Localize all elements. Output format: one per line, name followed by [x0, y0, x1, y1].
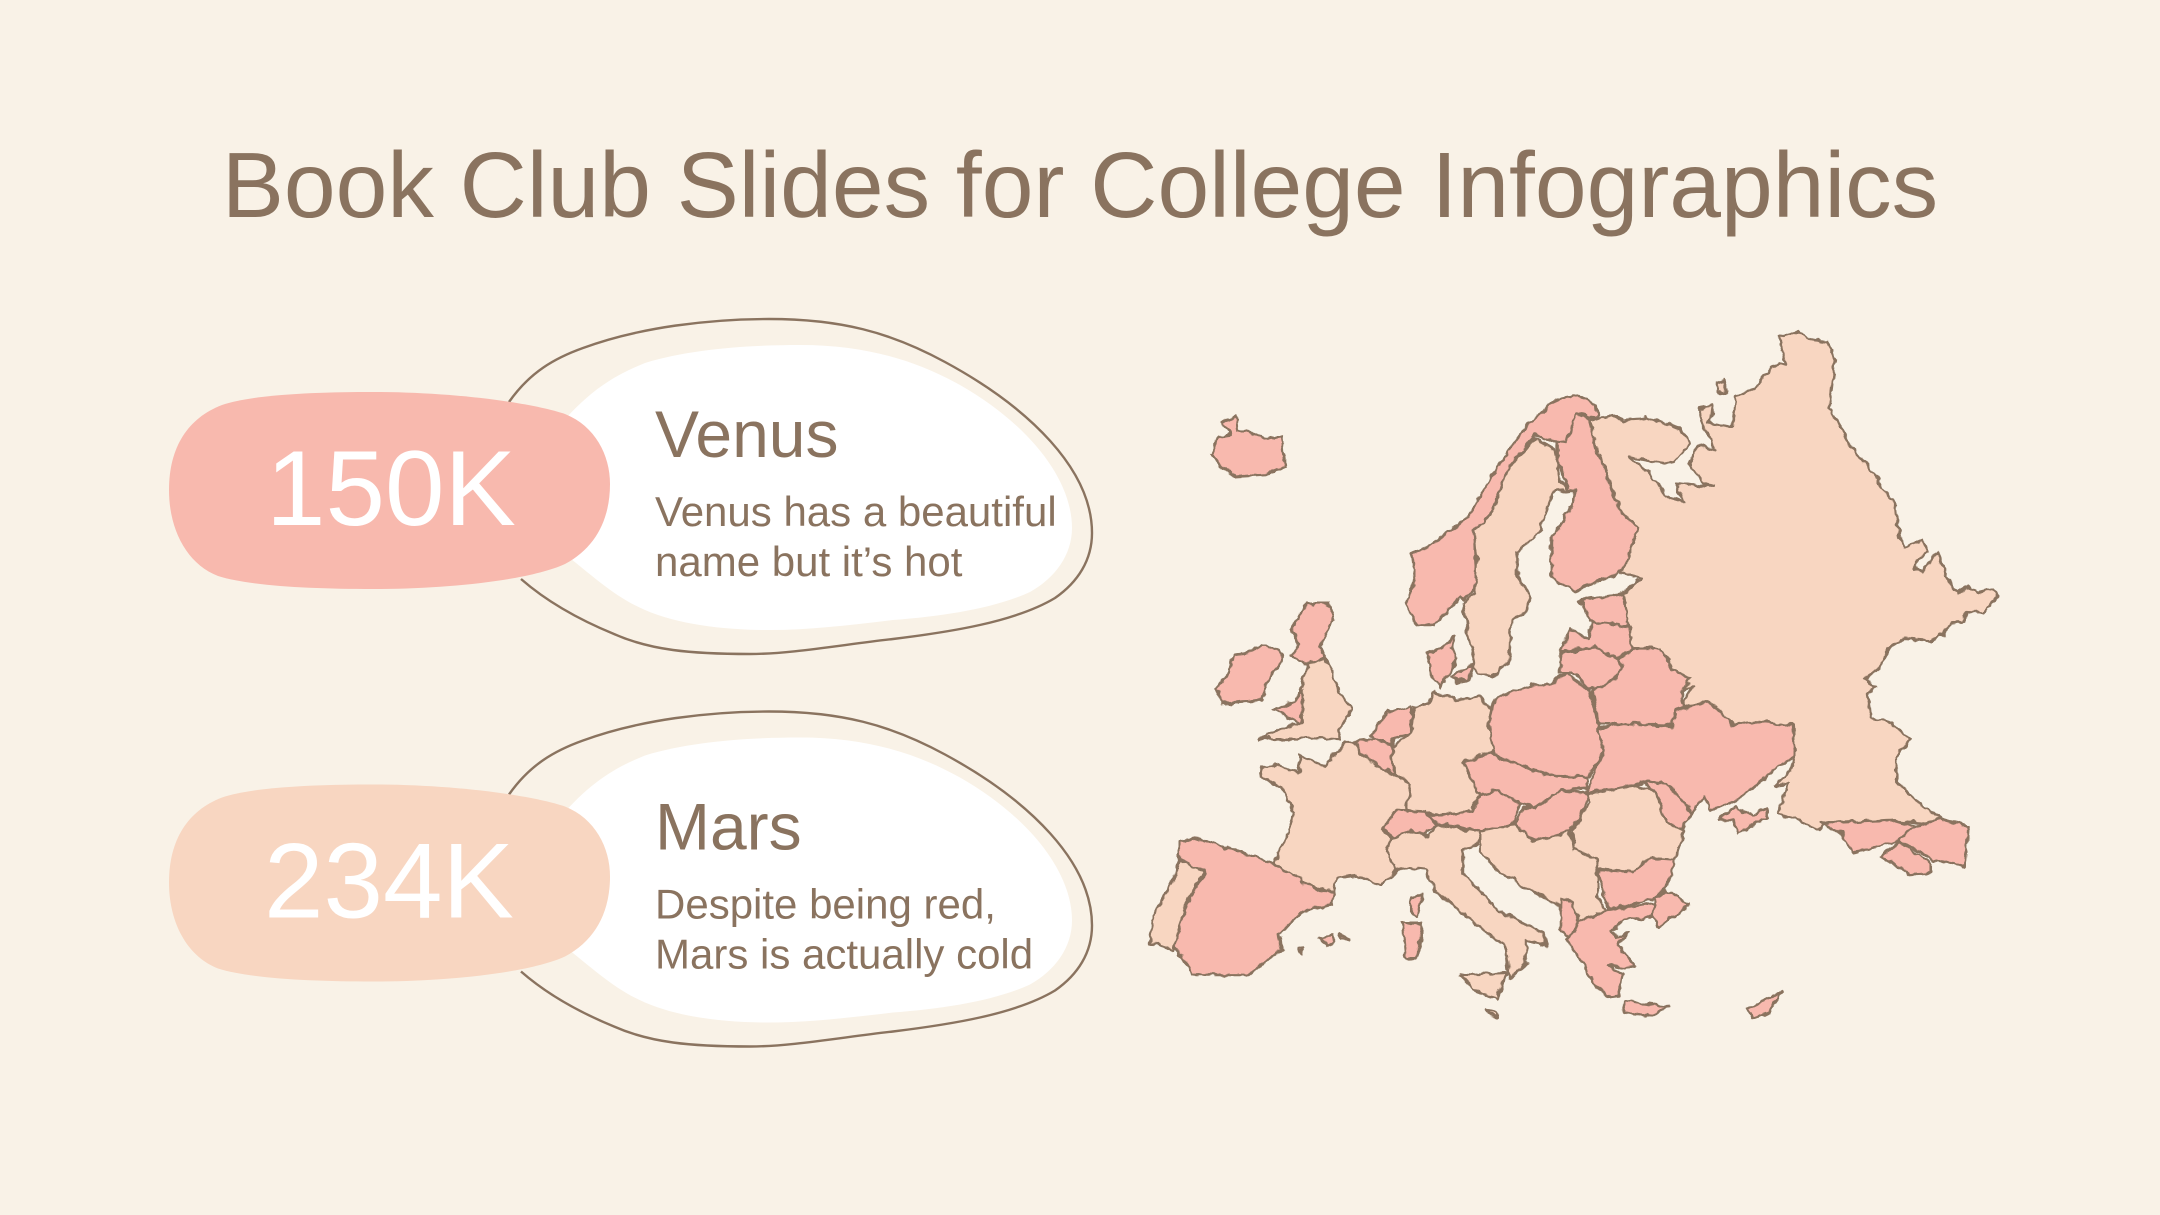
description: Despite being red,: [655, 880, 996, 928]
Spain: [1173, 838, 1334, 975]
heading: Mars: [655, 790, 802, 864]
outline blob: [509, 319, 1092, 654]
Novaya Zemlya islet: [1715, 381, 1727, 393]
Moldova: [1644, 782, 1693, 830]
Balearic islands: [1299, 947, 1305, 953]
value: 234K: [264, 820, 514, 940]
Greece: [1566, 903, 1655, 997]
Romania: [1572, 785, 1684, 872]
description: Mars is actually cold: [655, 930, 1033, 978]
Poland: [1489, 673, 1604, 777]
Wales: [1274, 690, 1303, 723]
Balearic islands 3: [1340, 934, 1348, 939]
Sweden: [1463, 438, 1569, 677]
England: [1259, 657, 1351, 740]
white card: [560, 345, 1072, 630]
map of Europe: [1150, 331, 1997, 1018]
panel: Venus: [169, 319, 1092, 654]
Italy: [1385, 825, 1546, 978]
Danish islands: [1451, 663, 1474, 682]
heading: Venus: [655, 397, 838, 471]
Switzerland: [1383, 810, 1437, 838]
Norway: [1406, 395, 1598, 625]
Crete: [1624, 1002, 1670, 1017]
Finland: [1552, 413, 1638, 592]
Balkans: [1480, 825, 1606, 922]
Ireland: [1216, 645, 1282, 703]
Germany: [1391, 692, 1494, 813]
outline blob: [509, 712, 1092, 1046]
Georgia: [1822, 820, 1916, 853]
Estonia: [1581, 593, 1628, 627]
Albania: [1560, 898, 1581, 942]
Belarus: [1592, 648, 1690, 725]
Denmark: [1427, 635, 1457, 687]
Armenia: [1882, 842, 1931, 875]
Bulgaria: [1598, 858, 1675, 910]
Russia: [1589, 331, 1997, 830]
Scotland: [1291, 603, 1334, 663]
Hungary: [1515, 790, 1589, 842]
description: Venus has a beautiful: [655, 488, 1057, 535]
Ukraine: [1586, 702, 1796, 813]
value pill: [169, 784, 610, 982]
Corsica: [1411, 895, 1423, 917]
Crimea: [1718, 807, 1767, 833]
Azerbaijan: [1899, 818, 1968, 867]
Belgium: [1354, 740, 1394, 775]
Malta: [1487, 1010, 1497, 1017]
Portugal: [1150, 860, 1205, 950]
Netherlands: [1371, 707, 1411, 745]
value pill: [169, 392, 610, 589]
France: [1259, 742, 1411, 892]
panel: Mars: [169, 712, 1092, 1046]
Iceland: [1210, 415, 1285, 477]
Austria: [1428, 790, 1520, 832]
Czechia and Slovakia: [1463, 752, 1586, 808]
Cyprus: [1747, 992, 1781, 1018]
Turkish Thrace: [1652, 890, 1690, 927]
Sicily: [1460, 973, 1506, 1000]
Sardinia: [1403, 923, 1423, 958]
Lithuania: [1560, 647, 1624, 692]
white card: [560, 738, 1072, 1022]
Latvia: [1560, 622, 1632, 660]
title: Book Club Slides for College Infographics: [222, 133, 1938, 237]
Balearic islands 2: [1319, 936, 1334, 946]
value: 150K: [266, 428, 516, 548]
description: name but it’s hot: [655, 538, 963, 585]
